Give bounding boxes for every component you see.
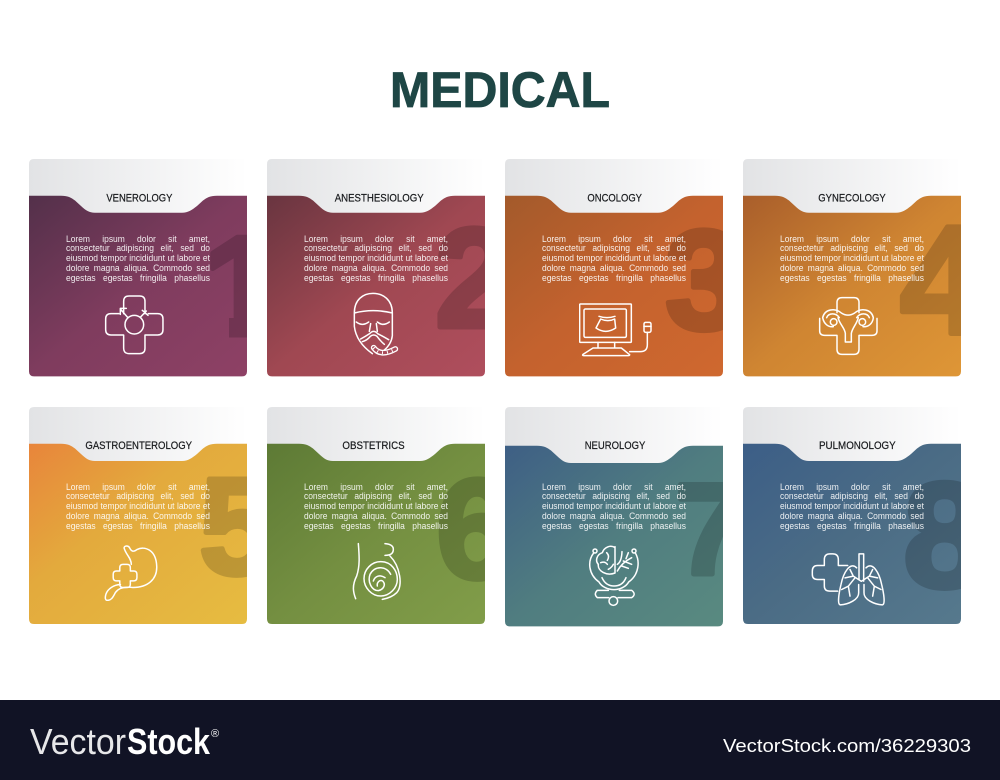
text block: eiusmod tempor incididunt ut labore et	[542, 501, 686, 511]
VectorStock logo: ®	[211, 728, 219, 740]
panel: gynecology: GYNECOLOGY	[818, 193, 886, 205]
icon: uterus in cross	[818, 296, 878, 356]
VectorStock logo: Stock	[127, 721, 211, 762]
text block: egestas egestas fringilla phasellus	[780, 273, 924, 283]
text block: eiusmod tempor incididunt ut labore et	[66, 253, 210, 263]
VectorStock logo	[30, 721, 219, 762]
panel: gastroenterology: GASTROENTEROLOGY	[86, 440, 193, 452]
text block: consectetur adipiscing elit, sed do	[304, 243, 448, 253]
text block: dolore magna aliqua. Commodo sed	[780, 511, 924, 521]
panel: neurology	[505, 407, 723, 626]
text block: dolore magna aliqua. Commodo sed	[66, 263, 210, 273]
panel: obstetrics: OBSTETRICS	[343, 440, 405, 452]
panel: pulmonology	[743, 407, 961, 624]
text block: consectetur adipiscing elit, sed do	[780, 491, 924, 501]
text block: dolore magna aliqua. Commodo sed	[304, 511, 448, 521]
text block	[780, 482, 924, 531]
text block: consectetur adipiscing elit, sed do	[66, 243, 210, 253]
text block: consectetur adipiscing elit, sed do	[542, 243, 686, 253]
text block	[304, 234, 448, 283]
text block: Lorem ipsum dolor sit amet,	[304, 482, 448, 492]
text block	[780, 234, 924, 283]
text block: dolore magna aliqua. Commodo sed	[304, 263, 448, 273]
icon: cross with gender symbols	[104, 295, 164, 354]
text block	[542, 482, 686, 531]
panel: gastroenterology	[29, 407, 247, 624]
panel: venerology	[29, 159, 247, 376]
text block: Lorem ipsum dolor sit amet,	[304, 234, 448, 244]
text block: Lorem ipsum dolor sit amet,	[780, 482, 924, 492]
icon: ultrasound monitor	[579, 303, 652, 356]
text block: eiusmod tempor incididunt ut labore et	[542, 253, 686, 263]
text block	[304, 482, 448, 531]
text block: Lorem ipsum dolor sit amet,	[542, 234, 686, 244]
text block: Lorem ipsum dolor sit amet,	[66, 482, 210, 492]
text block: dolore magna aliqua. Commodo sed	[780, 263, 924, 273]
text block: consectetur adipiscing elit, sed do	[780, 243, 924, 253]
panel: oncology: ONCOLOGY	[588, 193, 643, 205]
text block: egestas egestas fringilla phasellus	[66, 273, 210, 283]
text block: consectetur adipiscing elit, sed do	[66, 491, 210, 501]
panel: anesthesiology: ANESTHESIOLOGY	[335, 193, 425, 205]
panel: oncology	[505, 159, 723, 376]
text block: Lorem ipsum dolor sit amet,	[66, 234, 210, 244]
text block: dolore magna aliqua. Commodo sed	[66, 511, 210, 521]
text block: Lorem ipsum dolor sit amet,	[542, 482, 686, 492]
text block: consectetur adipiscing elit, sed do	[304, 491, 448, 501]
text block: egestas egestas fringilla phasellus	[66, 521, 210, 531]
VectorStock logo: Vector	[30, 721, 126, 762]
text block: consectetur adipiscing elit, sed do	[542, 491, 686, 501]
panel: pulmonology: PULMONOLOGY	[819, 440, 896, 452]
panel: obstetrics	[267, 407, 485, 624]
icon: pregnant belly with fetus	[352, 542, 401, 600]
text block: eiusmod tempor incididunt ut labore et	[304, 253, 448, 263]
text block: egestas egestas fringilla phasellus	[304, 273, 448, 283]
panel: gynecology	[743, 159, 961, 376]
text block	[66, 234, 210, 283]
text block: eiusmod tempor incididunt ut labore et	[304, 501, 448, 511]
text block: egestas egestas fringilla phasellus	[304, 521, 448, 531]
image id: VectorStock.com/36229303	[723, 735, 971, 756]
text block: dolore magna aliqua. Commodo sed	[542, 263, 686, 273]
text block	[542, 234, 686, 283]
panel: neurology: NEUROLOGY	[585, 440, 646, 452]
panel: anesthesiology	[267, 159, 485, 376]
text block	[66, 482, 210, 531]
text block: eiusmod tempor incididunt ut labore et	[780, 501, 924, 511]
panel: venerology: VENEROLOGY	[107, 193, 173, 205]
text block: dolore magna aliqua. Commodo sed	[542, 511, 686, 521]
text block: egestas egestas fringilla phasellus	[780, 521, 924, 531]
text block: eiusmod tempor incididunt ut labore et	[780, 253, 924, 263]
icon: stethoscope and brain	[588, 546, 639, 606]
text block: egestas egestas fringilla phasellus	[542, 273, 686, 283]
icon: stomach with cross	[104, 545, 158, 601]
icon: anesthesia mask face	[354, 292, 398, 356]
footer bar	[0, 700, 1000, 780]
text block: eiusmod tempor incididunt ut labore et	[66, 501, 210, 511]
icon: lungs with cross	[812, 553, 885, 606]
text block: egestas egestas fringilla phasellus	[542, 521, 686, 531]
text block: Lorem ipsum dolor sit amet,	[780, 234, 924, 244]
